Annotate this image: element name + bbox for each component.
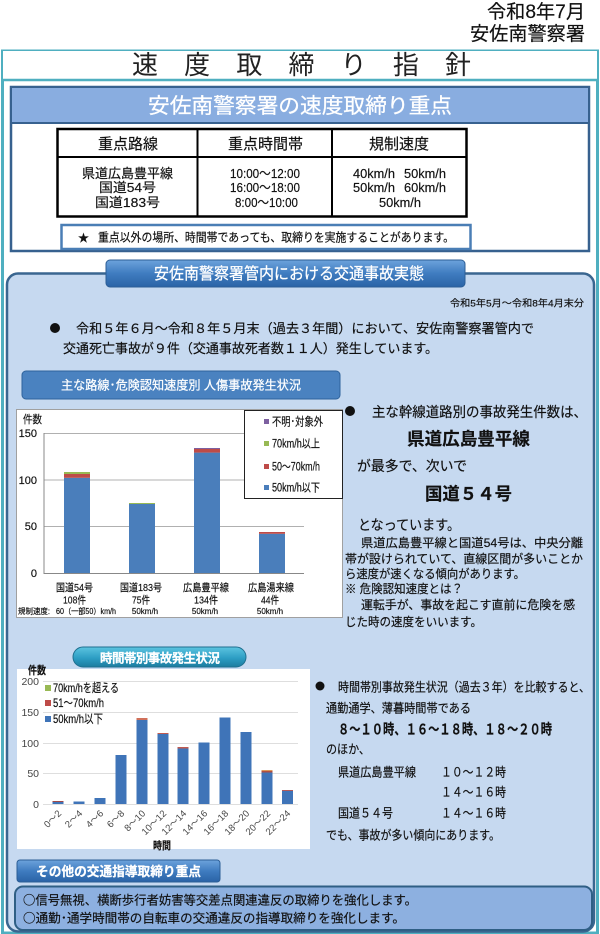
x axis labels: 22～24: [264, 808, 293, 838]
bar chart: accidents by route: 100: [19, 475, 37, 487]
callout: other priorities: ○信号無視、横断歩行者妨害等交差点関連違反の取締りを強化します。: [23, 890, 417, 908]
x axis labels: 14～16: [181, 808, 210, 838]
panel: speed enforcement priorities: [11, 87, 589, 251]
x axis labels: [18, 581, 294, 616]
x axis labels: 6～8: [105, 808, 127, 830]
text: time-of-day analysis: １０～１２時: [441, 766, 506, 780]
text: route analysis: [345, 404, 587, 629]
heading: other enforcement priorities: その他の交通指導取締り重点: [36, 864, 201, 879]
x axis labels: 12～14: [160, 808, 189, 838]
x axis labels: 規制速度:: [18, 606, 50, 616]
text: route analysis: 県道広島豊平線と国道54号は、中央分離: [361, 535, 583, 550]
bar: 国道54号: [64, 472, 90, 573]
legend: 70km/h以上: [272, 438, 320, 450]
text: time-of-day analysis: １４～１６時: [441, 786, 506, 800]
legend: 51～70km/h: [53, 696, 104, 710]
x axis labels: 広島豊平線: [183, 581, 229, 594]
x axis labels: 108件: [63, 594, 86, 606]
bars by two-hour slot: [52, 718, 293, 804]
bar chart: accidents by route: 0: [31, 568, 37, 580]
x axis labels: 国道183号: [120, 581, 162, 594]
bar chart: accidents by time of day: 件数: [28, 663, 46, 677]
callout: other priorities: ○通勤･通学時間帯の自転車の交通違反の指導取締りを強化します。: [23, 908, 405, 926]
table: priority routes, times, limits: 国道54号: [99, 180, 156, 195]
sub-heading: route accidents: [22, 371, 340, 399]
table: priority routes, times, limits: 50km/h: [353, 180, 395, 195]
bar chart: accidents by route: 50: [25, 521, 37, 533]
date and issuer: 令和8年7月: [487, 1, 585, 23]
table: priority routes, times, limits: 8:00～10:00: [235, 195, 298, 210]
bar chart: accidents by route: 件数: [23, 413, 42, 426]
x axis labels: 20～22: [244, 808, 273, 838]
text: route analysis: ※ 危険認知速度とは？: [345, 582, 463, 596]
table: priority routes, times, limits: 60km/h: [404, 180, 446, 195]
legend: 不明･対象外: [272, 416, 323, 428]
summary text: [50, 321, 534, 356]
bar chart: accidents by time of day: [17, 663, 310, 852]
text: time-of-day analysis: １４～１６時: [441, 806, 506, 820]
table: priority routes, times, limits: 規制速度: [369, 136, 429, 153]
title: 速 度 取 締 り 指 針: [132, 50, 471, 80]
section heading: [106, 260, 465, 287]
x axis labels: 4～6: [84, 808, 106, 830]
table: priority routes, times, limits: 県道広島豊平線: [82, 166, 173, 181]
text: route analysis: ら速度が速くなる傾向があります。: [345, 566, 525, 581]
table: priority routes, times, limits: 重点路線: [98, 136, 158, 153]
note box: 重点以外の場所、時間帯であっても、取締りを実施することがあります。: [98, 230, 454, 244]
text: route analysis: が最多で、次いで: [357, 458, 467, 474]
table: priority routes, times, limits: 40km/h: [353, 166, 395, 181]
bar chart: accidents by time of day: 0: [33, 799, 39, 811]
x axis labels: 75件: [132, 594, 150, 606]
x axis labels: 18～20: [223, 808, 252, 838]
text: time-of-day analysis: 国道５４号: [338, 806, 393, 820]
panel heading: [11, 88, 589, 123]
text: route analysis: となっています。: [358, 517, 460, 533]
callout: other priorities: [15, 886, 592, 930]
pill heading: time-of-day accidents: [73, 647, 246, 667]
text: route analysis: 主な幹線道路別の事故発生件数は、: [372, 404, 587, 420]
x axis labels: 2～4: [63, 808, 85, 830]
text: route analysis: 国道５４号: [425, 484, 512, 504]
bar: 国道183号: [129, 503, 155, 573]
legend: [45, 680, 119, 726]
legend: 50km/h以下: [272, 482, 320, 494]
table: priority routes, times, limits: 国道183号: [95, 195, 160, 210]
legend: 50km/h以下: [53, 712, 103, 726]
panel: traffic accident situation: [7, 260, 594, 932]
table: priority routes, times, limits: [57, 129, 467, 217]
x axis labels: 50km/h: [192, 607, 218, 616]
text: route analysis: じた時の速度をいいます。: [345, 615, 482, 629]
bar chart: accidents by time of day: 50: [27, 768, 39, 780]
note box: ★: [78, 230, 89, 246]
x axis labels: [42, 808, 293, 838]
text: route analysis: 運転手が、事故を起こす直前に危険を感: [361, 597, 575, 612]
text: time-of-day analysis: 通勤通学、薄暮時間帯である: [326, 700, 471, 716]
x axis labels: 50km/h: [132, 607, 158, 616]
bar: 広島湯来線: [259, 532, 285, 573]
title: [3, 50, 597, 80]
x axis labels: 60（一部50）km/h: [56, 607, 116, 616]
bar chart: accidents by time of day: 200: [21, 676, 39, 688]
x axis labels: 50km/h: [257, 607, 283, 616]
x axis labels: 0～2: [42, 808, 64, 830]
text: time-of-day analysis: でも、事故が多い傾向にあります。: [326, 828, 500, 842]
table: priority routes, times, limits: 10:00～12:00: [230, 166, 300, 181]
x axis labels: 10～12: [140, 808, 169, 838]
bar chart: accidents by time of day: 100: [21, 738, 39, 750]
table: priority routes, times, limits: 50km/h: [379, 195, 421, 210]
legend: 50～70km/h: [272, 462, 320, 474]
text: time-of-day analysis: 県道広島豊平線: [338, 764, 416, 780]
x axis labels: 8～10: [122, 808, 148, 834]
table: priority routes, times, limits: 重点時間帯: [228, 136, 303, 153]
legend: [244, 410, 342, 498]
summary text: 交通死亡事故が９件（交通事故死者数１１人）発生しています。: [63, 341, 438, 356]
bar chart: accidents by route: 150: [19, 428, 37, 440]
x axis labels: 44件: [261, 594, 279, 606]
pill heading: time-of-day accidents: 時間帯別事故発生状況: [100, 650, 220, 666]
table: priority routes, times, limits: 50km/h: [404, 166, 446, 181]
period note: 令和5年5月～令和8年4月末分: [450, 298, 585, 310]
bar chart: accidents by time of day: 時間: [153, 839, 171, 852]
section heading: 安佐南警察署管内における交通事故実態: [154, 265, 424, 283]
bar chart: accidents by route: [16, 410, 342, 618]
date and issuer: [470, 1, 585, 45]
x axis labels: 134件: [194, 594, 218, 606]
heading: other enforcement priorities: [17, 860, 220, 882]
text: time-of-day analysis: のほか、: [326, 742, 370, 756]
bar chart: accidents by time of day: 150: [21, 707, 39, 719]
panel heading: 安佐南警察署の速度取締り重点: [148, 95, 452, 118]
x axis labels: 16～18: [202, 808, 231, 838]
sub-heading: route accidents: 主な路線･危険認知速度別 人傷事故発生状況: [61, 378, 301, 392]
text: route analysis: 帯が設けられていて、直線区間が多いことか: [345, 551, 583, 566]
x axis labels: 広島湯来線: [248, 581, 294, 594]
date and issuer: 安佐南警察署: [470, 23, 585, 45]
bar: 広島豊平線: [194, 448, 220, 573]
text: route analysis: 県道広島豊平線: [407, 429, 531, 449]
x axis labels: 国道54号: [56, 581, 93, 594]
note box: [62, 225, 470, 249]
text: time-of-day analysis: [316, 680, 590, 842]
legend: 70km/hを超える: [53, 680, 119, 695]
summary text: 令和５年６月～令和８年５月末（過去３年間）において、安佐南警察署管内で: [76, 321, 534, 336]
table: priority routes, times, limits: 16:00～18:00: [230, 180, 300, 195]
